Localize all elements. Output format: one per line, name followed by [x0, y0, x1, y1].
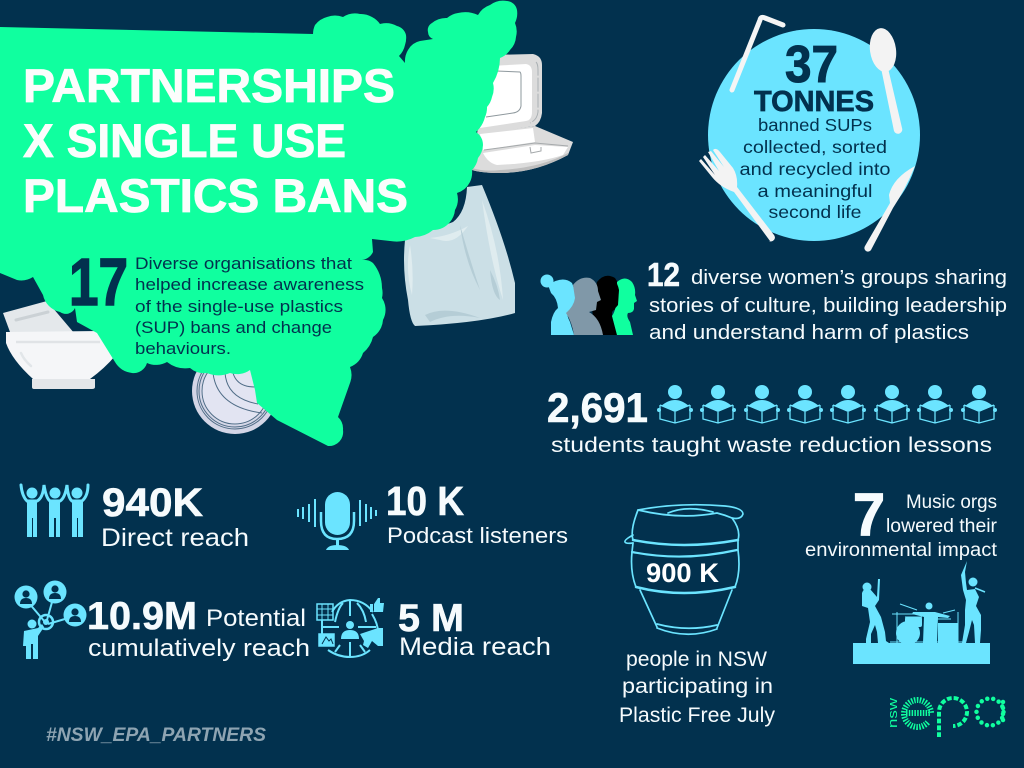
stat: 940K direct reach	[101, 481, 249, 552]
stat: 7 music orgs: lowered their	[886, 516, 998, 537]
stat: tonnes: TONNES	[754, 86, 874, 118]
text: Plastic Free July: people in NSW	[626, 647, 768, 671]
stat: 10.9M potential reach: 10.9M	[87, 595, 197, 638]
icon: plastic bowl	[3, 301, 115, 389]
icon: women silhouettes	[540, 274, 637, 335]
text: tonnes description: a meaningful	[758, 181, 872, 201]
text: Plastic Free July: Plastic Free July	[619, 703, 775, 727]
text: tonnes description: second life	[768, 202, 862, 222]
icon: globe media	[317, 598, 384, 657]
guitarist	[862, 579, 889, 643]
icon: plastic clamshell container	[472, 54, 573, 173]
icon: three people arms raised	[21, 485, 88, 537]
icon: spoon	[867, 26, 902, 134]
stat: 12 women's groups: diverse women’s groups sharing	[691, 266, 1007, 289]
stat: 5 M media reach	[398, 597, 551, 661]
stat: 7 music orgs	[805, 481, 998, 561]
stat: 5 M media reach: 5 M	[398, 597, 464, 640]
stat: 2,691 students: 2,691	[547, 384, 648, 431]
logo: NSW EPA: nsw	[886, 697, 900, 728]
text: Plastic Free July: participating in	[622, 674, 773, 698]
stat: 940K direct reach: 940K	[102, 481, 203, 525]
text: tonnes description: and recycled into	[740, 159, 890, 179]
stat: 12 women's groups: and understand harm of plastics	[649, 321, 969, 344]
icon: straw	[732, 17, 783, 90]
stat: 17 organisations: (SUP) bans and change	[135, 318, 332, 337]
stat: 12 women's groups: 12	[647, 256, 680, 293]
text: tonnes description	[740, 115, 890, 222]
title: PLASTICS BANS	[23, 169, 408, 222]
icon: people network	[14, 580, 86, 659]
icon: row of students reading	[657, 385, 997, 423]
icon: knife	[864, 166, 915, 252]
icon: plastic bag	[404, 185, 515, 326]
icon: reusable cup	[625, 505, 743, 634]
text: tonnes description: banned SUPs	[758, 115, 872, 135]
stat: 37: 37	[785, 36, 838, 94]
stat: 2,691 students: students taught waste reduction lessons	[551, 433, 992, 457]
icon: podcast microphone	[298, 492, 376, 550]
stat: 10 K podcast listeners: Podcast listeners	[387, 523, 568, 548]
icon: band on stage	[853, 561, 990, 664]
icon: fork	[699, 149, 775, 241]
panel: 37 tonnes circle	[699, 17, 920, 252]
drummer and kit	[890, 602, 966, 645]
icon: plastic plate	[192, 348, 278, 434]
stat: 2,691 students	[547, 384, 997, 457]
stat: 17 organisations	[69, 245, 364, 358]
title: PARTNERSHIPS	[23, 59, 395, 112]
stat: 17 organisations: 17	[69, 245, 128, 320]
stat: 10.9M potential reach	[87, 595, 310, 662]
stat: 7 music orgs: environmental impact	[805, 540, 998, 561]
stat: 17 organisations: helped increase awareness	[135, 275, 364, 294]
title	[23, 59, 408, 222]
stat: 10 K podcast listeners: 10 K	[386, 478, 464, 524]
stat: 7 music orgs: Music orgs	[906, 492, 997, 513]
hashtag: #NSW_EPA_PARTNERS	[46, 725, 266, 746]
singer	[961, 561, 985, 643]
stat: 940K direct reach: Direct reach	[101, 524, 249, 552]
stat: 5 M media reach: Media reach	[399, 633, 551, 661]
stat: 17 organisations: behaviours.	[135, 339, 231, 358]
stat: 12 women's groups: stories of culture, building leadership	[649, 294, 1007, 317]
stat: 900 K: 900 K	[646, 558, 719, 588]
title: X SINGLE USE	[23, 114, 346, 167]
stat: 10 K podcast listeners	[386, 478, 568, 548]
panel: green NSW map shape	[0, 1, 517, 446]
logo: NSW EPA	[886, 697, 1004, 737]
text: tonnes description: collected, sorted	[743, 137, 887, 157]
stat: 17 organisations: Diverse organisations that	[135, 254, 352, 273]
stat: 17 organisations: of the single-use plastics	[135, 297, 343, 316]
stat: 10.9M potential reach: Potential	[206, 605, 306, 632]
stat: 10.9M potential reach: cumulatively reach	[88, 635, 310, 662]
stat: 7 music orgs: 7	[853, 481, 885, 548]
stat: 12 women's groups	[647, 256, 1007, 344]
text: Plastic Free July	[619, 647, 775, 727]
